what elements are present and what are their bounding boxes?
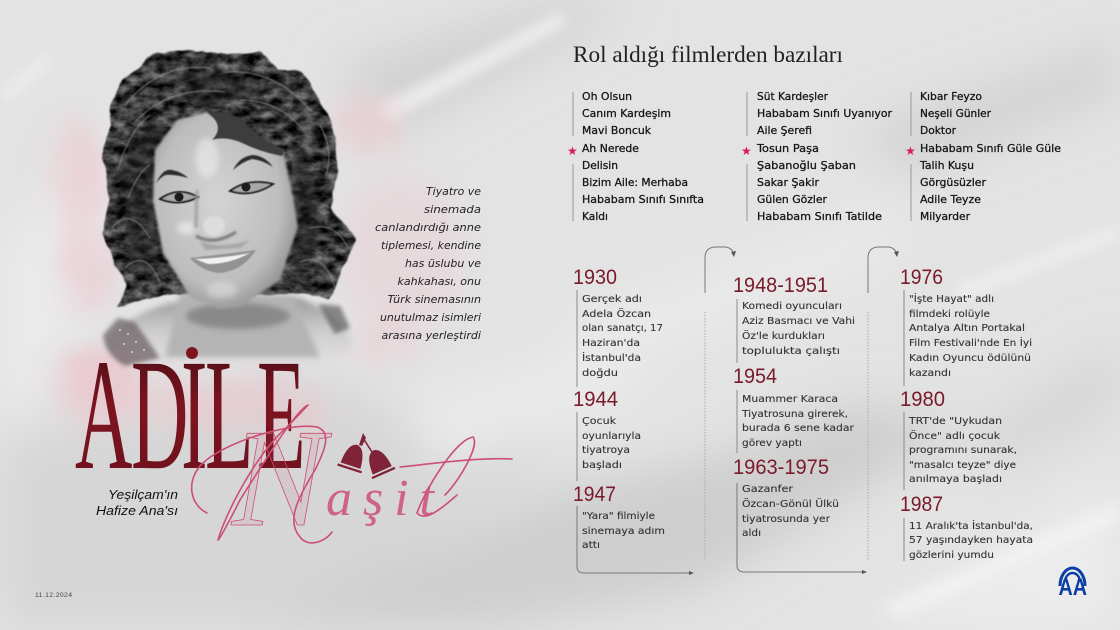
- film list column 3: Adile Teyze: [920, 193, 981, 206]
- film list column 3: Milyarder: [920, 210, 971, 223]
- entry 1944: oyunlarıyla: [582, 431, 641, 442]
- entry 1947: "Yara" filmiyle: [582, 511, 655, 522]
- entry 1987: [900, 493, 1033, 561]
- quote text: Türk sinemasının: [388, 294, 481, 306]
- timeline column 2: [705, 247, 867, 574]
- film list column 2: Tosun Paşa: [756, 142, 819, 155]
- film list column 1: Mavi Boncuk: [582, 124, 652, 137]
- icon: AA logo: AA: [1058, 574, 1087, 601]
- entry 1930: olan sanatçı, 17: [582, 323, 663, 334]
- quote text: has üslubu ve: [405, 258, 481, 270]
- pink watercolor wash behind portrait: [50, 100, 460, 433]
- entry 1930: Haziran'da: [582, 338, 640, 349]
- entry 1963-1975: Özcan-Gönül Ülkü: [742, 497, 839, 510]
- entry 1963-1975: Gazanfer: [742, 484, 794, 495]
- hair strands: [112, 67, 347, 288]
- quote text: Tiyatro ve: [426, 186, 481, 198]
- film list column 3: Hababam Sınıfı Güle Güle: [920, 142, 1061, 155]
- neck: [165, 292, 320, 357]
- film list column 3: Neşeli Günler: [920, 107, 992, 120]
- quote text: tiplemesi, kendine: [381, 240, 481, 252]
- entry 1980: [900, 388, 1017, 490]
- name heading: Adile: [76, 347, 302, 468]
- film list column 2: Gülen Gözler: [757, 193, 828, 206]
- script flourishes: [192, 405, 512, 543]
- chin shadow: [186, 303, 290, 329]
- quote text: sinemada: [424, 204, 481, 216]
- entry 1954: burada 6 sene kadar: [742, 423, 855, 434]
- entry 1980: Önce" adlı çocuk: [909, 429, 1000, 442]
- entry 1987: gözlerini yumdu: [909, 550, 994, 561]
- date: 11.12.2024: [35, 592, 72, 599]
- quote text: canlandırdığı anne: [375, 222, 481, 234]
- hair shade: [120, 70, 321, 280]
- arrow into column 2: [705, 247, 736, 293]
- icon: bells: [337, 433, 395, 479]
- entry 1987: 11 Aralık'ta İstanbul'da,: [909, 519, 1033, 532]
- entry 1944: tiyatroya: [582, 445, 630, 456]
- film list column 3: Doktor: [920, 124, 957, 137]
- icon: AA logo: [1058, 568, 1087, 601]
- entry 1963-1975: aldı: [742, 528, 761, 539]
- right eye and brow: [230, 155, 273, 193]
- film list column 1: Delisin: [582, 159, 618, 172]
- film list column 2: Şabanoğlu Şaban: [757, 159, 856, 172]
- entry 1980: anılmaya başladı: [909, 474, 1002, 485]
- entry 1947: attı: [582, 540, 600, 551]
- entry 1963-1975: 1963-1975: [733, 456, 829, 479]
- entry 1976: "İşte Hayat" adlı: [909, 292, 994, 305]
- entry 1976: 1976: [900, 266, 943, 289]
- film list column 2: Aile Şerefi: [757, 124, 812, 137]
- name heading: Adile: ADİLE: [75, 328, 306, 503]
- quote text: kahkahası, onu: [398, 276, 481, 288]
- forelock: [207, 112, 285, 156]
- shoulders and chest: [104, 298, 352, 372]
- entry 1930: [573, 266, 663, 387]
- film list column 1: Kaldı: [582, 210, 608, 223]
- entry 1954: [733, 365, 855, 453]
- entry 1948-1951: 1948-1951: [733, 274, 828, 297]
- film list column 2: Süt Kardeşler: [757, 90, 829, 103]
- portrait photo: [100, 50, 355, 372]
- entry 1976: [900, 266, 1032, 386]
- entry 1963-1975: [733, 456, 839, 539]
- entry 1944: başladı: [582, 460, 622, 471]
- entry 1947: 1947: [573, 483, 616, 506]
- icon: star: ★: [741, 144, 752, 158]
- entry 1963-1975: tiyatrosunda yer: [742, 514, 831, 525]
- entry 1930: doğdu: [582, 367, 618, 379]
- entry 1954: görev yaptı: [742, 438, 802, 449]
- entry 1930: 1930: [573, 266, 617, 289]
- entry 1947: sinemaya adım: [582, 526, 665, 537]
- entry 1944: 1944: [573, 388, 618, 411]
- left eye and brow: [156, 170, 198, 203]
- film list column 1: [567, 90, 704, 223]
- arrow into column 3: [868, 247, 899, 293]
- films heading: Rol aldığı filmlerden bazıları: [573, 42, 843, 67]
- film list column 2: Hababam Sınıfı Tatilde: [757, 210, 882, 223]
- icon: star: ★: [905, 144, 916, 158]
- quote text: [375, 186, 481, 342]
- film list column 2: Hababam Sınıfı Uyanıyor: [757, 107, 893, 120]
- entry 1980: programını sunarak,: [909, 445, 1017, 456]
- entry 1948-1951: Öz'le kurdukları: [742, 329, 825, 342]
- entry 1948-1951: toplulukta çalıştı: [742, 346, 840, 357]
- entry 1944: Çocuk: [582, 416, 616, 427]
- entry 1948-1951: Komedi oyuncuları: [742, 301, 842, 312]
- quote text: unutulmaz isimleri: [380, 312, 481, 324]
- face: [153, 112, 298, 309]
- entry 1947: [573, 483, 665, 551]
- dress left with sequins: [103, 318, 160, 366]
- mouth: [190, 250, 256, 273]
- film list column 1: Canım Kardeşim: [582, 107, 671, 120]
- dress right: [318, 304, 350, 334]
- film list column 1: Ah Nerede: [582, 142, 639, 155]
- entry 1980: TRT'de "Uykudan: [908, 416, 1002, 427]
- entry 1954: Muammer Karaca: [742, 394, 838, 405]
- entry 1976: Kadın Oyuncu ödülünü: [909, 353, 1031, 364]
- subtitle: Hafize Ana'sı: [96, 504, 178, 518]
- entry 1987: 57 yaşındayken hayata: [909, 535, 1033, 546]
- name script: Naşit: N: [230, 401, 332, 556]
- entry 1976: Antalya Altın Portakal: [909, 323, 1025, 334]
- entry 1980: 1980: [900, 388, 945, 411]
- film list column 3: Talih Kuşu: [919, 159, 974, 172]
- entry 1980: "masalcı teyze" diye: [909, 460, 1016, 471]
- entry 1930: Adela Özcan: [582, 307, 651, 320]
- film list column 2: Sakar Şakir: [757, 176, 820, 189]
- entry 1954: Tiyatrosuna girerek,: [741, 409, 848, 420]
- arrow to column 3: [737, 483, 867, 574]
- subtitle: [96, 488, 178, 518]
- entry 1976: Film Festivali'nde En İyi: [909, 336, 1032, 349]
- film list column 1: Oh Olsun: [582, 90, 632, 103]
- arrow to column 2: [577, 506, 694, 575]
- entry 1976: filmdeki rolüyle: [909, 309, 990, 320]
- entry 1954: 1954: [733, 365, 777, 388]
- quote text: arasına yerleştirdi: [382, 330, 481, 342]
- entry 1948-1951: [733, 274, 855, 363]
- entry 1944: [573, 388, 641, 481]
- film list column 3: [905, 90, 1061, 223]
- name script: Naşit: aşit: [326, 470, 436, 527]
- name script: Naşit: [192, 401, 512, 556]
- hair mass: [100, 50, 355, 307]
- film list column 1: Hababam Sınıfı Sınıfta: [582, 193, 704, 206]
- nose: [196, 190, 250, 250]
- entry 1976: kazandı: [909, 368, 951, 379]
- film list column 1: Bizim Aile: Merhaba: [582, 176, 688, 189]
- entry 1930: Gerçek adı: [582, 294, 642, 305]
- film list column 2: [741, 90, 893, 223]
- timeline column 1: [573, 266, 694, 575]
- timeline column 3: [868, 247, 1033, 561]
- film list column 3: Kıbar Feyzo: [920, 90, 982, 103]
- entry 1987: 1987: [900, 493, 943, 516]
- entry 1948-1951: Aziz Basmacı ve Vahi: [742, 316, 855, 327]
- face highlights: [177, 138, 238, 298]
- icon: star: ★: [567, 144, 578, 158]
- entry 1930: İstanbul'da: [582, 351, 641, 364]
- film list column 3: Görgüsüzler: [920, 176, 987, 189]
- subtitle: Yeşilçam'ın: [108, 488, 178, 502]
